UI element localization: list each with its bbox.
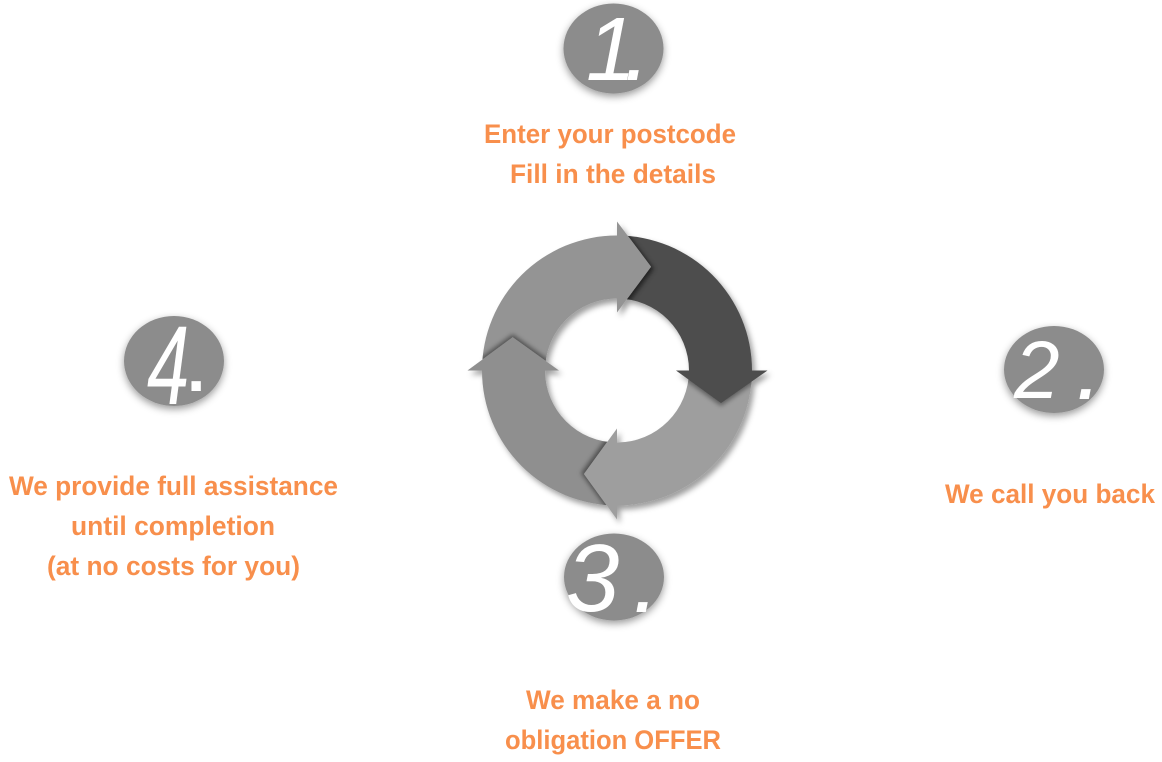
step 1 caption bbox=[484, 119, 736, 189]
step 2 caption: We call you back bbox=[945, 479, 1156, 509]
step 4 caption: We provide full assistance bbox=[9, 471, 338, 501]
number 3: 3 bbox=[566, 525, 619, 632]
arrow head: bottom-right arrow bbox=[584, 428, 617, 520]
step 1 caption: Fill in the details bbox=[510, 159, 716, 189]
arrow head: top-left arrow bbox=[617, 222, 651, 312]
step 2 badge bbox=[1004, 325, 1104, 416]
step 3 caption: We make a no bbox=[526, 685, 700, 715]
arrow head: dark arrow bbox=[676, 370, 768, 403]
step 3 caption: obligation OFFER bbox=[505, 725, 721, 755]
number 2: . bbox=[1078, 339, 1096, 413]
step 4 caption: until completion bbox=[71, 511, 275, 541]
arrow head: bottom-left arrow bbox=[468, 337, 559, 370]
arrow body: top-right dark segment bbox=[617, 236, 752, 370]
step 4 caption bbox=[9, 471, 338, 581]
arrow body: bottom-left segment bbox=[482, 370, 617, 506]
number 2: 2 bbox=[1014, 325, 1060, 416]
cycle diagram: four circular arrows bbox=[468, 222, 768, 520]
number 1: 1 bbox=[586, 0, 636, 100]
step 3 caption bbox=[505, 685, 721, 755]
step 1 caption: Enter your postcode bbox=[484, 119, 736, 149]
number 1: . bbox=[626, 20, 644, 94]
number 3: . bbox=[635, 552, 653, 626]
number 4: . bbox=[187, 331, 205, 405]
arrow body: top-left segment bbox=[482, 236, 617, 370]
step 4 caption: (at no costs for you) bbox=[47, 551, 300, 581]
arrow body: bottom-right segment bbox=[617, 370, 752, 506]
step 3 badge bbox=[564, 525, 664, 632]
step 4 badge bbox=[124, 303, 224, 429]
number 4: 4 bbox=[147, 303, 189, 429]
step 1 badge bbox=[564, 0, 664, 100]
